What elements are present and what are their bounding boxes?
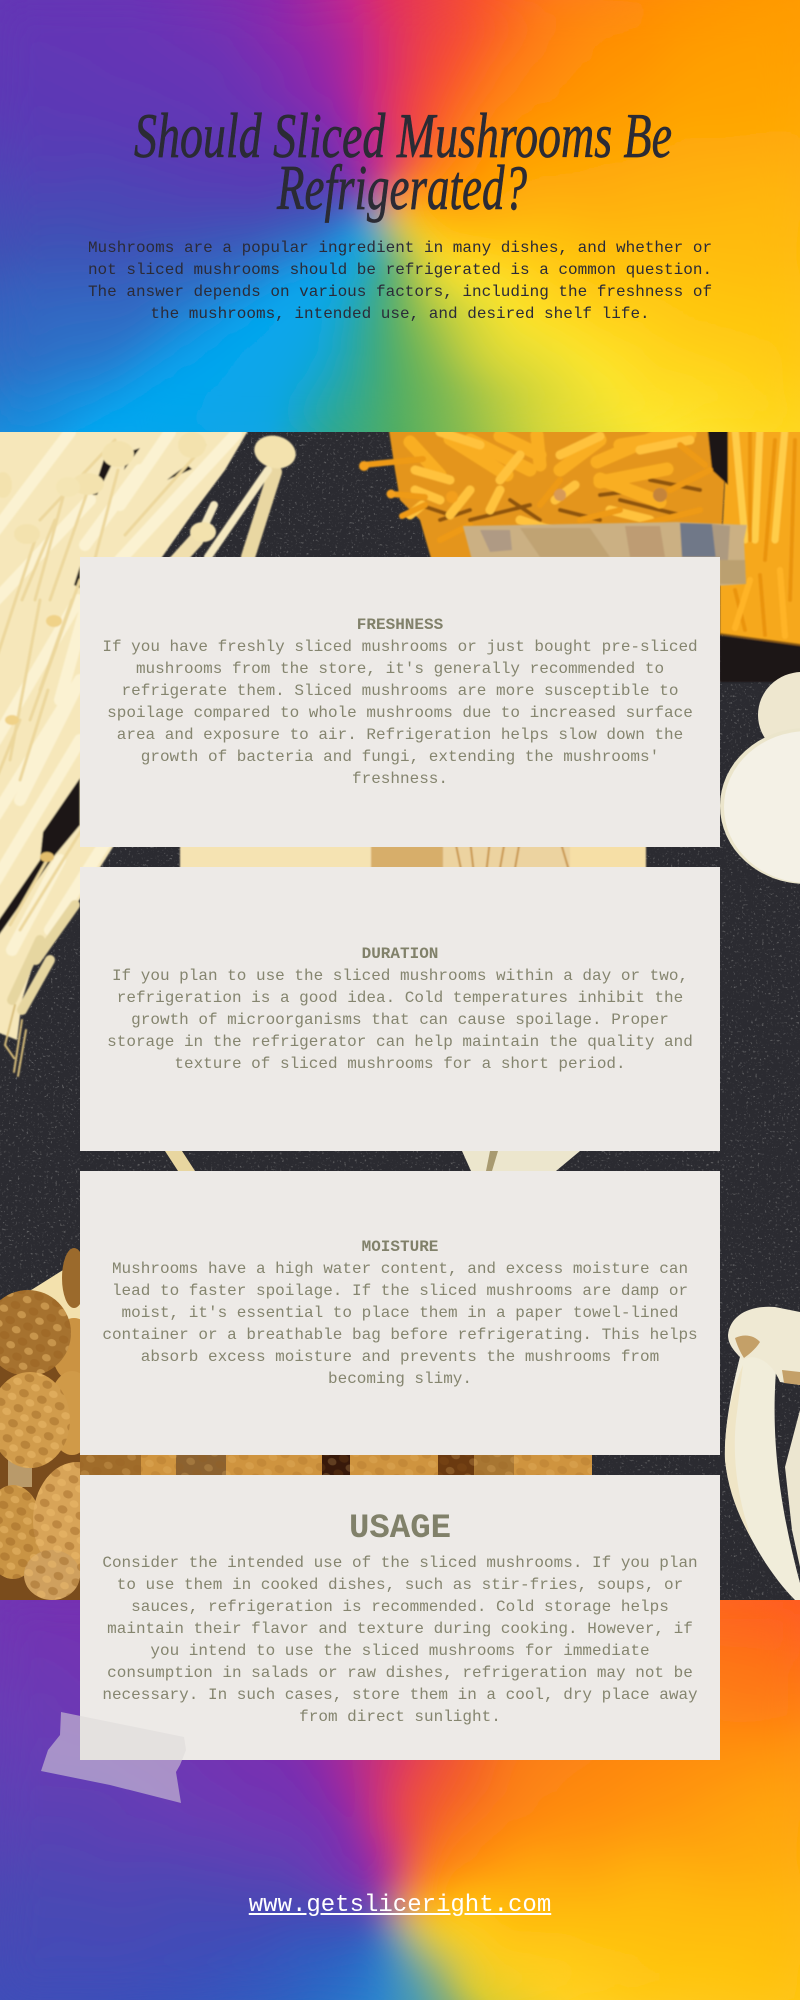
body text: moisture: becoming slimy. [328, 1370, 472, 1388]
white button mushrooms [720, 672, 800, 884]
body text: freshness: freshness. [352, 770, 448, 788]
footer website link: www.getsliceright.com [249, 1892, 551, 1919]
panel: duration [80, 867, 720, 1151]
body text: duration: storage in the refrigerator can help maintain the quality and [107, 1033, 693, 1051]
intro text block: not sliced mushrooms should be refrigerated is a common question. [88, 261, 712, 279]
intro text block: The answer depends on various factors, including the freshness of [88, 283, 712, 301]
intro text block: the mushrooms, intended use, and desired shelf life. [150, 305, 650, 323]
body text: duration: refrigeration is a good idea. Cold temperatures inhibit the [117, 989, 683, 1007]
body text: moisture: absorb excess moisture and prevents the mushrooms from [141, 1348, 659, 1366]
title [134, 100, 672, 223]
mushroom stems showing between panels [165, 1151, 580, 1171]
dark slate background [0, 432, 800, 1600]
brown shimeji mushrooms [0, 1248, 121, 1600]
body text: usage: to use them in cooked dishes, such as stir-fries, soups, or [117, 1576, 683, 1594]
body text: freshness: If you have freshly sliced mushrooms or just bought pre-sliced [102, 638, 698, 656]
body text: usage: Consider the intended use of the sliced mushrooms. If you plan [102, 1554, 698, 1572]
body text: duration: growth of microorganisms that can cause spoilage. Proper [131, 1011, 669, 1029]
body text: duration: If you plan to use the sliced mushrooms within a day or two, [112, 967, 688, 985]
heading: freshness: FRESHNESS [357, 616, 443, 634]
heading: usage: USAGE [349, 1510, 451, 1548]
intro text block: Mushrooms are a popular ingredient in many dishes, and whether or [88, 239, 712, 257]
body text: usage: necessary. In such cases, store them in a cool, dry place away [102, 1686, 698, 1704]
masking tape top [463, 522, 747, 586]
body text: moisture: Mushrooms have a high water content, and excess moisture can [112, 1260, 688, 1278]
panel: usage [80, 1475, 720, 1760]
heading: duration: DURATION [362, 945, 438, 963]
body text: usage: from direct sunlight. [299, 1708, 501, 1726]
body text: freshness: growth of bacteria and fungi, extending the mushrooms' [141, 748, 659, 766]
white king oyster mushrooms [725, 1307, 800, 1600]
body text: duration [107, 967, 693, 1073]
body text: usage [102, 1554, 698, 1726]
panel: freshness [80, 557, 720, 847]
panel: top rainbow header background [0, 0, 800, 432]
panel: bottom rainbow footer background [0, 1600, 800, 2000]
orange mushroom cluster [359, 424, 800, 682]
title: Refrigerated? [276, 152, 527, 223]
heading: moisture: MOISTURE [362, 1238, 438, 1256]
body text: freshness: refrigerate them. Sliced mushrooms are more susceptible to [122, 682, 678, 700]
panel: mushroom photo band [0, 432, 800, 1600]
body text: moisture: lead to faster spoilage. If the sliced mushrooms are damp or [112, 1282, 688, 1300]
brown mushrooms showing between panels [80, 1455, 592, 1475]
enoki caps [0, 431, 299, 862]
masking tape bottom [41, 1712, 186, 1803]
body text: usage: consumption in salads or raw dishes, refrigeration may not be [107, 1664, 693, 1682]
body text: usage: sauces, refrigeration is recommended. Cold storage helps [131, 1598, 669, 1616]
body text: freshness [102, 638, 698, 788]
body text: moisture [102, 1260, 698, 1388]
intro text block [88, 239, 712, 323]
body text: duration: texture of sliced mushrooms for a short period. [174, 1055, 626, 1073]
body text: freshness: mushrooms from the store, it's generally recommended to [136, 660, 664, 678]
body text: moisture: moist, it's essential to place them in a paper towel-lined [122, 1304, 678, 1322]
body text: moisture: container or a breathable bag before refrigerating. This helps [102, 1326, 698, 1344]
body text: usage: maintain their flavor and texture during cooking. However, if [107, 1620, 693, 1638]
body text: freshness: spoilage compared to whole mushrooms due to increased surface [107, 704, 693, 722]
enoki mushrooms [0, 424, 299, 1076]
body text: usage: you intend to use the sliced mushrooms for immediate [150, 1642, 650, 1660]
panel: moisture [80, 1171, 720, 1455]
body text: freshness: area and exposure to air. Refrigeration helps slow down the [117, 726, 683, 744]
oyster mushroom showing between panels [180, 840, 646, 874]
